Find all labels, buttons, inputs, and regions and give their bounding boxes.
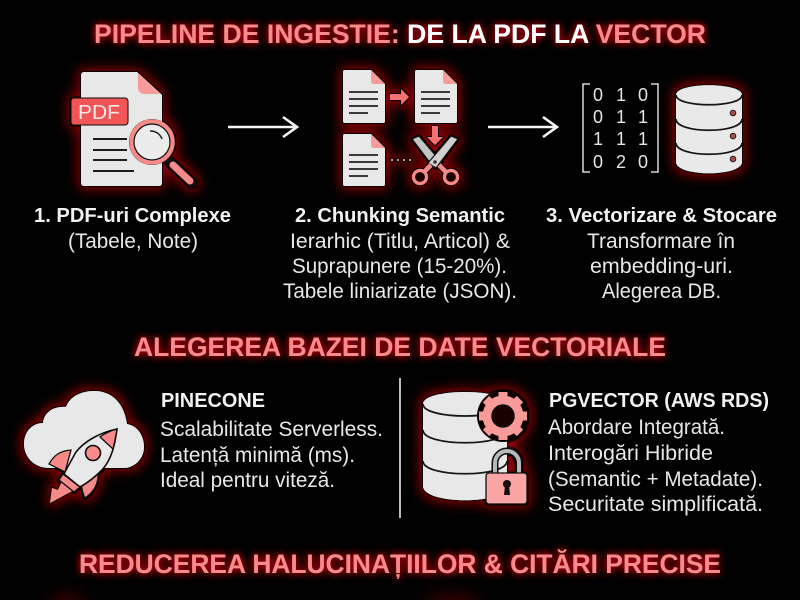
icon: vector matrix: 1 bbox=[616, 129, 626, 149]
arrow: step 1 to step 2 bbox=[228, 117, 297, 137]
icon: vector matrix: 0 bbox=[593, 107, 603, 127]
icon: vector matrix: 1 bbox=[638, 107, 648, 127]
icon: PDF document with magnifier bbox=[71, 72, 192, 186]
heading: hallucination reduction: REDUCEREA HALUCINAȚIILOR & CITĂRI PRECISE bbox=[79, 548, 721, 579]
icon: vector matrix bbox=[583, 84, 658, 172]
step 3 text: Transformare în bbox=[587, 230, 735, 253]
icon: vector matrix: 1 bbox=[638, 129, 648, 149]
icon: vector matrix: 0 bbox=[593, 85, 603, 105]
panel: PGVector: (Semantic + Metadate). bbox=[548, 468, 763, 491]
step 2 text: Ierarhic (Titlu, Articol) & bbox=[290, 230, 510, 253]
icon: vector matrix: 1 bbox=[593, 129, 603, 149]
title: PIPELINE DE INGESTIE: DE LA PDF LA VECTOR bbox=[94, 19, 706, 49]
panel: PGVector: Interogări Hibride bbox=[548, 442, 713, 465]
icon: vector matrix: 0 bbox=[638, 152, 648, 172]
step 3 text bbox=[546, 204, 777, 303]
step 2 text: Tabele liniarizate (JSON). bbox=[283, 280, 517, 303]
icon: semantic chunking bbox=[343, 70, 458, 186]
panel: PGVector: Securitate simplificată. bbox=[548, 493, 763, 516]
cropped glow at bottom edge bbox=[50, 596, 480, 600]
panel: PGVector: PGVECTOR (AWS RDS) bbox=[549, 389, 769, 412]
step 3 text: 3. Vectorizare & Stocare bbox=[546, 204, 777, 227]
step 3 text: Alegerea DB. bbox=[602, 280, 721, 303]
step 2 text: 2. Chunking Semantic bbox=[295, 204, 505, 227]
icon: database bbox=[676, 85, 742, 173]
icon: database with gear and lock bbox=[423, 390, 529, 504]
panel: Pinecone bbox=[160, 389, 383, 492]
panel: Pinecone: PINECONE bbox=[161, 389, 265, 412]
panel: Pinecone: Ideal pentru viteză. bbox=[160, 469, 335, 492]
icon: vector matrix: 1 bbox=[616, 85, 626, 105]
arrow: step 2 to step 3 bbox=[488, 117, 557, 137]
step 3 text: embedding-uri. bbox=[590, 255, 733, 278]
icon: vector matrix: 2 bbox=[616, 152, 626, 172]
panel: Pinecone: Scalabilitate Serverless. bbox=[160, 418, 383, 441]
icon: cloud with rocket bbox=[24, 391, 144, 503]
step 1 text: 1. PDF-uri Complexe bbox=[34, 204, 231, 227]
step 2 text: Suprapunere (15-20%). bbox=[292, 255, 507, 278]
icon: PDF document with magnifier: PDF bbox=[78, 102, 120, 124]
panel: PGVector bbox=[548, 389, 769, 516]
heading: vector database choice: ALEGEREA BAZEI DE DATE VECTORIALE bbox=[134, 332, 666, 362]
icon: vector matrix: 1 bbox=[616, 107, 626, 127]
icon: vector matrix: 0 bbox=[593, 152, 603, 172]
step 1 text: (Tabele, Note) bbox=[68, 230, 198, 253]
panel: PGVector: Abordare Integrată. bbox=[548, 416, 725, 439]
icon: vector matrix: 0 bbox=[638, 85, 648, 105]
panel: Pinecone: Latență minimă (ms). bbox=[160, 444, 355, 467]
step 1 text bbox=[34, 204, 231, 253]
step 2 text bbox=[283, 204, 517, 303]
